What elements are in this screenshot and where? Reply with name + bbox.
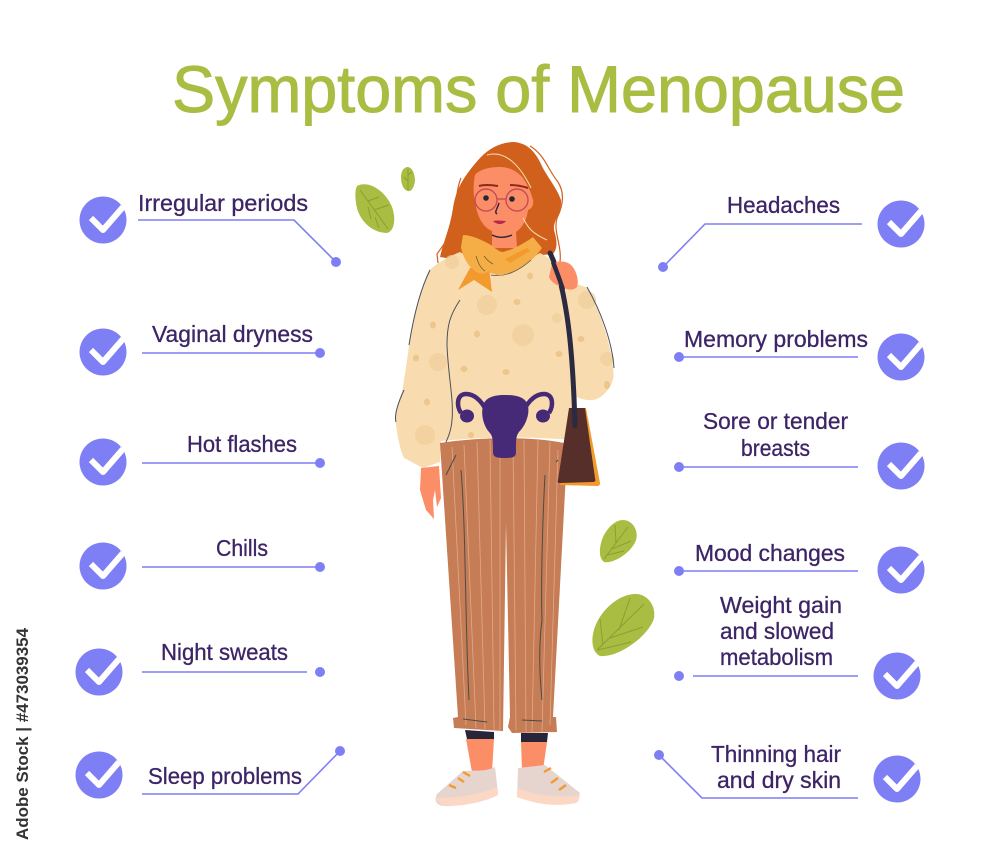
scarf — [458, 235, 542, 292]
item: Sore or tender breasts: Sore or tender — [703, 408, 848, 434]
leaf: right small — [600, 520, 637, 562]
item: Hot flashes: Hot flashes — [187, 431, 297, 457]
sweater — [395, 252, 614, 468]
item: Thinning hair and dry skin — [654, 741, 920, 802]
right hand — [549, 262, 578, 290]
title: Symptoms of Menopause — [172, 52, 905, 126]
trousers — [440, 438, 566, 733]
hair highlights — [487, 154, 547, 240]
item: Memory problems: Memory problems — [684, 326, 868, 352]
item: Hot flashes — [80, 431, 325, 486]
item: Vaginal dryness — [80, 321, 325, 376]
item: Chills: Chills — [216, 535, 268, 561]
neck and face — [474, 167, 533, 248]
face details — [475, 185, 528, 237]
leaf: upper left small — [401, 167, 415, 191]
item: Sore or tender breasts — [674, 408, 924, 490]
sweater pattern — [413, 255, 614, 445]
sweater folds — [395, 270, 614, 452]
item: Weight gain and slowed metabolism: and slowed — [720, 618, 834, 644]
woman figure — [395, 142, 614, 806]
icon: uterus — [458, 394, 552, 458]
item: Thinning hair and dry skin: Thinning hair — [711, 741, 841, 767]
item: Sleep problems: Sleep problems — [148, 763, 302, 789]
item: Mood changes: Mood changes — [695, 540, 845, 566]
item: Sore or tender breasts: breasts — [741, 435, 810, 461]
socks and legs — [465, 730, 548, 772]
shoes — [435, 765, 580, 806]
item: Memory problems — [674, 326, 924, 380]
stock credit: Adobe Stock | #473039354 — [13, 627, 32, 840]
handbag — [558, 408, 600, 486]
shoulder strap — [550, 253, 575, 426]
leaf: right large — [592, 594, 654, 656]
item: Headaches: Headaches — [727, 192, 840, 218]
left hand — [420, 466, 441, 519]
item: Weight gain and slowed metabolism: Weight gain — [720, 592, 842, 618]
item: Headaches — [658, 192, 924, 272]
item: Night sweats: Night sweats — [161, 639, 288, 665]
item: Weight gain and slowed metabolism — [674, 592, 920, 700]
item: Irregular periods — [80, 190, 341, 267]
item: Chills — [80, 535, 325, 590]
item: Irregular periods: Irregular periods — [138, 190, 308, 216]
item: Mood changes — [674, 540, 924, 594]
hair — [440, 142, 561, 262]
item: Thinning hair and dry skin: and dry skin — [717, 767, 841, 793]
item: Weight gain and slowed metabolism: metabolism — [720, 644, 833, 670]
item: Vaginal dryness: Vaginal dryness — [152, 321, 313, 347]
leaf: upper left large — [355, 184, 394, 233]
item: Sleep problems — [76, 746, 345, 798]
item: Night sweats — [76, 639, 325, 696]
